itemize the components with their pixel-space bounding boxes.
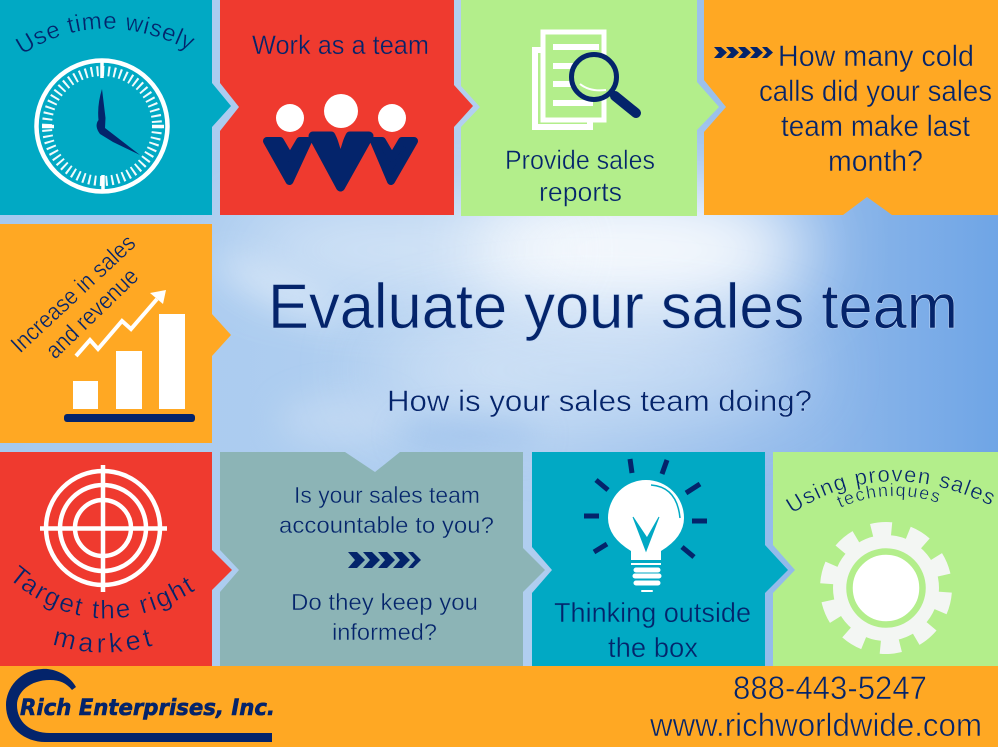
- panel: provide sales reports: [461, 0, 719, 216]
- icon: clock: [36, 59, 168, 193]
- text: cold calls question: How many cold: [778, 40, 974, 73]
- panel: cold calls question: [704, 0, 998, 215]
- icon: chevrons: [714, 47, 773, 58]
- text: using proven sales techniques: Using proven sales: [786, 470, 994, 511]
- text: using proven sales techniques: techniques: [836, 483, 940, 508]
- heading: use time wisely: Use time wisely: [15, 14, 195, 52]
- title: Evaluate your sales team: [268, 272, 958, 342]
- icon: gear: [814, 516, 958, 660]
- text: target the right market: Target the right: [13, 564, 196, 619]
- logo: rich enterprises: [6, 669, 275, 742]
- contact details: [649, 670, 982, 743]
- text: target the right market: market: [54, 630, 153, 652]
- footer band: [0, 666, 998, 747]
- icon: chevrons: [348, 552, 421, 568]
- subtitle: How is your sales team doing?: [387, 385, 812, 418]
- icon: light bulb: [584, 459, 707, 591]
- text: accountability question: [279, 482, 494, 538]
- text: keep informed question: [291, 589, 478, 645]
- text: increase in sales and revenue: and revenue: [40, 263, 144, 364]
- contact details: 888-443-5247: [733, 670, 927, 706]
- panel: use time wisely: [0, 0, 231, 215]
- contact details: www.richworldwide.com: [649, 707, 982, 743]
- text: provide sales reports: [505, 145, 655, 207]
- text: provide sales reports: Provide sales: [505, 145, 655, 175]
- icon: team of three people: [267, 94, 414, 187]
- text: accountability question: accountable to you?: [279, 512, 494, 538]
- logo: rich enterprises: Rich Enterprises, Inc.: [20, 696, 275, 721]
- panel: accountability questions: [220, 452, 545, 666]
- chart: rising bars and arrow: [64, 290, 195, 422]
- text: thinking outside the box: the box: [608, 632, 698, 663]
- panel: thinking outside the box: [532, 452, 788, 666]
- panel: increase in sales and revenue: [0, 224, 231, 443]
- text: keep informed question: informed?: [332, 619, 437, 645]
- text: cold calls question: [759, 40, 992, 178]
- text: provide sales reports: reports: [539, 177, 622, 207]
- text: accountability question: Is your sales team: [294, 482, 480, 508]
- text: increase in sales and revenue: Increase in sales: [6, 230, 141, 358]
- icon: target: [40, 465, 167, 592]
- panel: target the right market: [0, 452, 232, 666]
- heading: work as a team: Work as a team: [252, 30, 429, 60]
- text: thinking outside the box: Thinking outside: [554, 597, 751, 628]
- text: target the right market: [13, 564, 196, 652]
- text: cold calls question: month?: [828, 145, 923, 178]
- icon: documents and magnifier: [532, 32, 636, 130]
- text: keep informed question: Do they keep you: [291, 589, 478, 615]
- panel: using proven sales techniques: [773, 452, 998, 666]
- panel: work as a team: [220, 0, 473, 215]
- text: cold calls question: team make last: [781, 110, 971, 143]
- text: thinking outside the box: [554, 597, 751, 663]
